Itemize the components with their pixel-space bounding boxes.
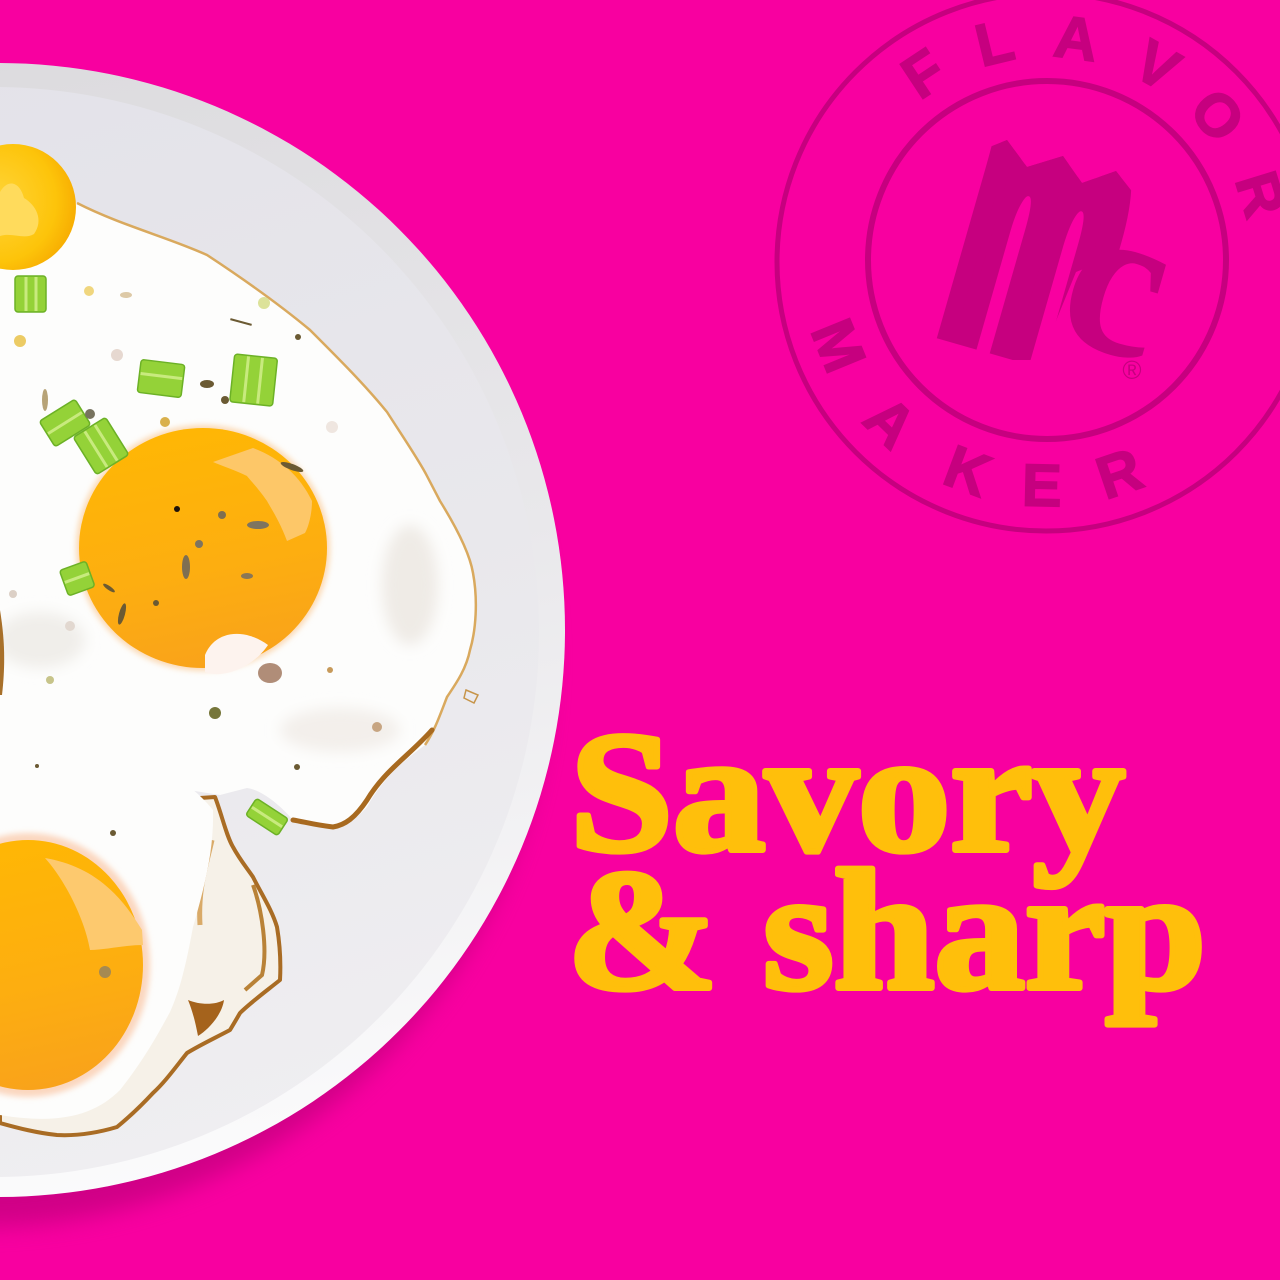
upper yolk [76,425,330,674]
seal wordmark: FLAVOR: A [1050,2,1102,74]
seal monogram [936,140,1166,379]
brand seal [777,0,1280,531]
headline: Savory [570,698,1125,888]
fried egg: lower [0,698,280,1135]
seal wordmark: MAKER: K [936,432,1000,510]
seal inner ring [868,81,1226,439]
seal wordmark: MAKER: A [851,383,929,461]
seal outer ring [777,0,1280,531]
seal monogram: ® [1122,355,1142,385]
seal wordmark: MAKER: M [798,310,879,381]
seal wordmark: FLAVOR: F [890,36,957,112]
lower yolk [0,833,150,1097]
headline: & sharp [567,836,1206,1026]
lace flap [0,797,280,1135]
seal monogram: c [1039,148,1200,409]
cherry tomato [0,144,76,270]
seal wordmark: FLAVOR: V [1123,26,1191,104]
plate shadow [0,93,547,1227]
seal monogram: m [916,0,1182,439]
seal wordmark: FLAVOR: O [1177,76,1258,155]
seal wordmark: FLAVOR [890,2,1280,225]
green onions [15,276,288,836]
seal wordmark: FLAVOR: L [969,6,1020,80]
egg white dome [0,698,213,1119]
egg shading [382,525,438,645]
headline [567,698,1206,1026]
yellow flecks and holes [9,286,478,732]
seal wordmark: MAKER: E [1021,451,1063,519]
plate [0,63,565,1197]
pepper and herb specks [35,318,304,978]
fried egg: upper [0,203,476,827]
seal wordmark: MAKER: R [1088,435,1151,512]
seal wordmark: MAKER [798,310,1151,519]
crisp edge of upper egg [77,203,476,745]
